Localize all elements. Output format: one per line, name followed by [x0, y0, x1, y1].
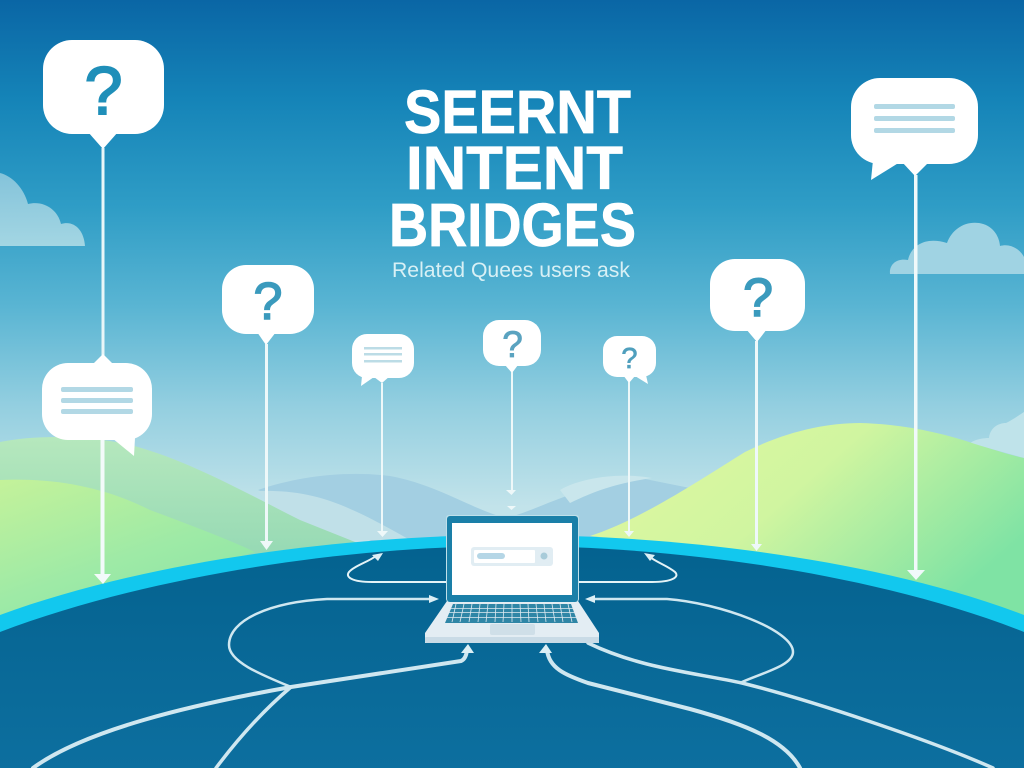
- title: INTENT: [406, 134, 623, 202]
- bubble 8: text lines, top right: [851, 78, 978, 180]
- arrow: bubble 3 to ground: [260, 344, 273, 550]
- bubble 3: question: [222, 265, 314, 345]
- laptop screen: [446, 515, 579, 602]
- bubble 5: question: ?: [502, 324, 523, 365]
- bubble 2: text lines, left: [42, 354, 152, 456]
- connector: bubble 1 to bubble 2: [102, 148, 104, 358]
- bubble 6: question: [603, 336, 656, 384]
- path far right: [588, 643, 993, 768]
- bubble 7: question: [710, 259, 805, 342]
- laptop keyboard: [445, 604, 578, 623]
- arrow: bubble 8 to ground: [907, 175, 925, 580]
- arrow: bubble 5 to laptop: [506, 372, 516, 510]
- hill: front left: [0, 480, 255, 630]
- laptop base: [425, 601, 599, 643]
- laptop: [425, 515, 599, 643]
- bubble 5: question: [483, 320, 541, 373]
- cloud: lower right: [970, 412, 1024, 458]
- arrow: bubble 7 to ground: [751, 341, 762, 551]
- bubble 4: text lines: [352, 334, 414, 386]
- small loop left: [348, 556, 446, 582]
- cloud: upper left: [0, 173, 85, 246]
- branch path left: [216, 687, 291, 768]
- laptop trackpad: [490, 624, 535, 635]
- search bar: [471, 547, 553, 566]
- arrow: bubble 6 to ground: [624, 382, 634, 537]
- small loop right: [578, 557, 676, 582]
- title: [389, 78, 636, 259]
- arrowheads on ground: [372, 553, 655, 653]
- ground with cyan horizon band: [0, 535, 1024, 768]
- bubble 1: question, top left: ?: [85, 53, 122, 129]
- hill: right: [590, 423, 1024, 630]
- arrow: bubble 4 to ground: [377, 383, 388, 537]
- title: BRIDGES: [389, 191, 636, 259]
- bubble 3: question: ?: [254, 273, 282, 331]
- bubble 7: question: ?: [743, 268, 773, 328]
- distant mountains: [258, 474, 700, 545]
- hill: back left: [0, 437, 400, 640]
- arrow lines on ground: [33, 556, 993, 768]
- subtitle: Related Quees users ask: [392, 259, 630, 282]
- arrow line to laptop from right: [590, 599, 793, 682]
- title: SEERNT: [404, 78, 631, 146]
- main path left: [33, 650, 467, 768]
- bubble 6: question: ?: [621, 343, 638, 375]
- path centre right: [547, 650, 800, 768]
- arrow: bubble 2 to ground: [94, 440, 111, 584]
- cloud: upper right: [890, 223, 1024, 274]
- bubble 1: question, top left: [43, 40, 164, 149]
- arrow line to laptop from left: [229, 599, 434, 687]
